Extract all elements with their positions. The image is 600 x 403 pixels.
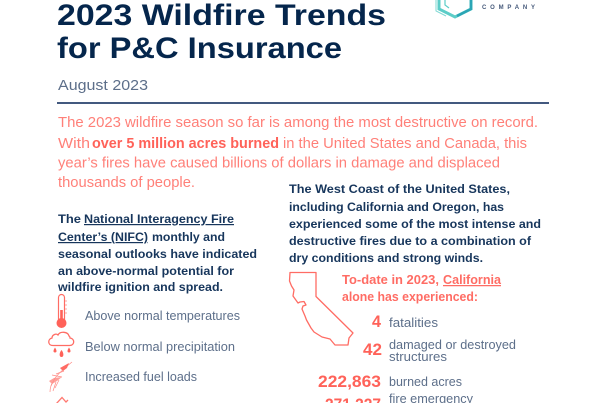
icon: thermometer — [56, 294, 67, 328]
stat: damaged or destroyed structures — [363, 338, 516, 364]
right text block: West Coast: dry conditions and strong winds. — [289, 251, 483, 265]
right text block: West Coast: including California and Oregon, has — [289, 200, 504, 214]
right text block: West Coast: experienced some of the most intense and — [289, 217, 541, 231]
logo — [436, 0, 535, 17]
intro paragraph: year’s fires have caused billions of dollars in damage and displaced — [58, 154, 500, 172]
intro paragraph: in the United States and Canada, this — [283, 135, 527, 152]
California stats heading: To-date in 2023, — [342, 273, 439, 287]
title — [57, 0, 386, 65]
intro paragraph: over 5 million acres burned — [92, 135, 279, 152]
intro paragraph: thousands of people. — [58, 174, 195, 191]
icon: hexagon logo mark — [436, 0, 471, 17]
date: August 2023 — [58, 78, 148, 94]
stat: fatalities: fatalities — [389, 316, 438, 330]
California stats heading: alone has experienced: — [342, 290, 478, 304]
left text block: NIFC outlook: monthly and — [152, 230, 225, 244]
icon: partly visible flame — [56, 398, 68, 403]
right text block: West Coast: The West Coast of the United States, — [289, 182, 510, 196]
stat: fatalities: 4 — [372, 313, 382, 331]
title: for P&C Insurance — [57, 32, 342, 65]
left text block: NIFC outlook: seasonal outlooks have indicated — [58, 247, 257, 261]
California stats heading: California — [443, 273, 502, 287]
intro paragraph: The 2023 wildfire season so far is among the most destructive on record. — [58, 114, 538, 131]
icon: California outline — [290, 272, 353, 345]
left text block: NIFC outlook: an above-normal potential for — [58, 264, 234, 278]
label: below normal precipitation: Below normal precipitation — [85, 340, 235, 354]
stat: fatalities — [372, 313, 438, 331]
company wordmark: COMPANY — [482, 5, 535, 11]
stat: damaged or destroyed structures: damaged or destroyed — [389, 338, 516, 352]
stat: fire emergency — [325, 392, 474, 403]
label: above normal temperatures: Above normal temperatures — [85, 309, 240, 323]
right text block: West Coast — [289, 182, 541, 265]
intro paragraph: With — [58, 135, 90, 152]
stat: burned acres: burned acres — [389, 375, 462, 389]
intro paragraph — [58, 114, 538, 191]
right text block: West Coast: destructive fires due to a combination of — [289, 234, 532, 248]
stat: burned acres: 222,863 — [318, 373, 381, 391]
label: increased fuel loads: Increased fuel loads — [85, 370, 197, 384]
stat: damaged or destroyed structures: structures — [389, 350, 447, 364]
California stats heading — [342, 273, 502, 304]
left text block: NIFC outlook: National Interagency Fire — [84, 212, 234, 226]
left text block: NIFC outlook: wildfire ignition and spread. — [57, 280, 223, 294]
icon: rain cloud — [49, 332, 74, 357]
stat: damaged or destroyed structures: 42 — [363, 341, 382, 359]
left text block: NIFC outlook — [57, 212, 257, 294]
left text block: NIFC outlook: Center’s (NIFC) — [58, 230, 148, 244]
icon: dry fuel branch — [49, 362, 72, 392]
left text block: NIFC outlook: The — [58, 212, 81, 226]
stat: burned acres — [318, 373, 462, 391]
